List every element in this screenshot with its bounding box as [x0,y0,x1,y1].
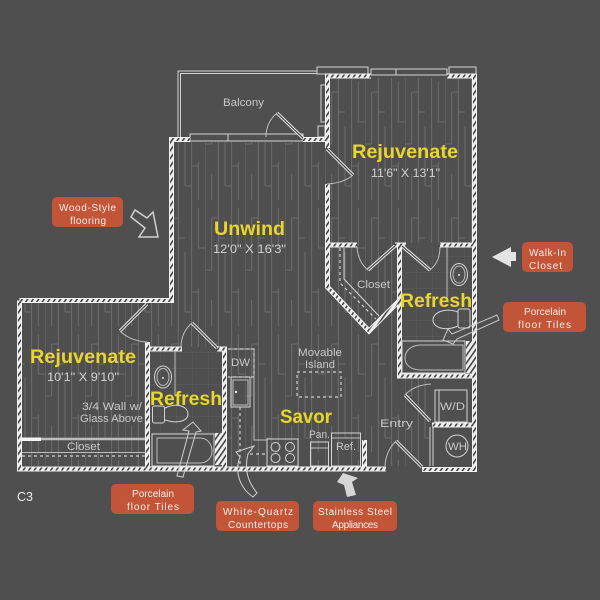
callout: Wood-Style flooring [52,197,123,227]
closet interior lines [340,248,379,319]
dimensions lower bedroom: 10'1" X 9'10" [47,370,119,384]
label: Ref: Ref. [336,441,356,453]
heading: Refresh left: Refresh [150,389,222,410]
callout: White-Quartz Countertops: White-Quartz [223,507,293,518]
heading: Refresh right: Refresh [400,291,472,312]
label: unit code C3: C3 [17,489,33,504]
callout: White-Quartz Countertops [216,501,299,531]
dimensions upper bedroom: 11'6" X 13'1" [371,166,440,180]
label: Balcony: Balcony [223,97,265,109]
arrow: white-quartz [236,446,257,497]
right bath fixtures [402,247,474,373]
callout: Wood-Style flooring: flooring [70,216,106,227]
arrow: wood flooring [131,210,158,237]
arrow: porcelain right [443,315,499,344]
heading: Unwind: Unwind [214,219,285,240]
label: Movable Island [298,347,342,371]
water heater: WH [448,441,467,453]
callout: Porcelain floor tiles left [111,484,194,514]
heading: Rejuvenate lower: Rejuvenate [30,347,136,368]
arrow: walk-in closet [492,247,516,267]
callout: Porcelain floor tiles right [503,302,586,332]
label: 3/4 wall: 3/4 Wall w/ [82,401,143,413]
callout: Porcelain floor tiles left: floor Tiles [127,502,179,513]
callout: Stainless Steel Appliances [313,501,397,531]
callout: Porcelain floor tiles right: floor Tiles [518,320,571,331]
washer dryer [435,390,467,422]
lower left closet [22,438,146,456]
label: Entry: Entry [380,418,414,430]
arrow: stainless appliances [337,473,358,497]
label: DW: DW [231,357,251,369]
callout: Porcelain floor tiles left: Porcelain [132,489,174,500]
washer dryer: W/D [440,401,465,413]
label: Closet upper: Closet [357,279,390,291]
heading: Rejuvenate upper: Rejuvenate [352,142,458,163]
dimensions living room: 12'0" X 16'3" [213,242,286,256]
heading: Savor: Savor [280,407,333,428]
label: Movable Island: Island [305,359,335,371]
callout: Walk-In Closet: Walk-In [529,248,566,259]
doors [120,113,440,468]
callout: Stainless Steel Appliances: Appliances [332,520,378,531]
callout: White-Quartz Countertops: Countertops [228,520,288,531]
bathroom tile floor, left [150,351,222,434]
label: 3/4 wall: Glass Above [80,413,143,425]
label: 3/4 wall [80,401,143,425]
wood plank flooring [20,76,475,468]
label: Pan: Pan. [309,429,330,441]
movable island outline [297,372,341,397]
label: Movable Island: Movable [298,347,342,359]
callout: Wood-Style flooring: Wood-Style [59,203,116,214]
balcony outline [178,67,476,141]
callout: Walk-In Closet: Closet [529,261,562,272]
callout: Stainless Steel Appliances: Stainless Steel [318,507,392,518]
water heater [430,427,468,466]
label: Closet lower: Closet [67,441,100,453]
bathroom tile floor, right [402,247,472,374]
left bath fixtures [152,351,224,466]
arrow: porcelain left [177,422,201,477]
exterior and interior walls [20,76,474,470]
callout: Walk-In Closet [522,242,573,272]
callout: Porcelain floor tiles right: Porcelain [524,307,566,318]
kitchen counters and appliances [228,349,360,466]
